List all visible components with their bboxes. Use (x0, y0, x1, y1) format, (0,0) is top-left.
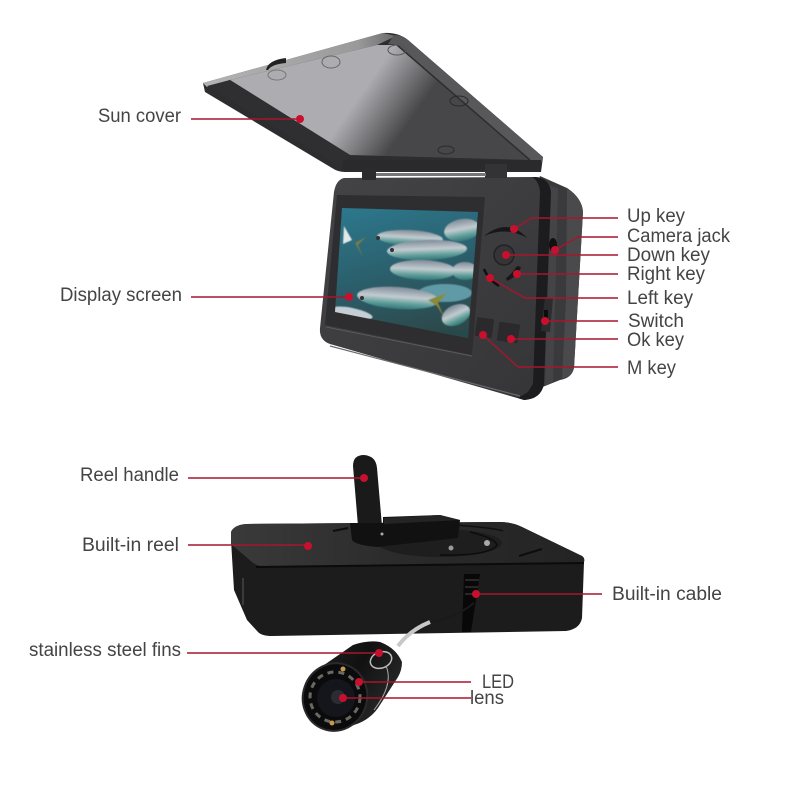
labels: M key (627, 358, 676, 379)
front housing (320, 177, 551, 400)
reel box (231, 522, 584, 636)
labels: Built-in cable (612, 584, 722, 605)
reel lid (231, 522, 584, 567)
labels: Ok key (627, 330, 684, 351)
labels: Up key (627, 206, 685, 227)
labels: Left key (627, 288, 693, 309)
labels: lens (470, 688, 504, 709)
labels: Down key (627, 245, 710, 266)
labels: Right key (627, 264, 705, 285)
labels: Camera jack (627, 226, 730, 247)
callout dots (296, 115, 559, 702)
labels: Display screen (60, 285, 182, 306)
labels: Reel handle (80, 465, 179, 486)
labels: Sun cover (98, 106, 182, 127)
labels: Built-in reel (82, 535, 179, 556)
camera probe (293, 641, 402, 740)
monitor: display unit (320, 176, 583, 400)
cable slot (462, 574, 480, 632)
callout lines (187, 119, 618, 698)
camera jack (549, 238, 557, 252)
labels: stainless steel fins (29, 640, 181, 661)
screen frame (325, 195, 485, 355)
control keys (484, 227, 527, 238)
sun cover (203, 33, 543, 180)
reel handle (350, 455, 460, 547)
camera cable (398, 603, 474, 646)
display screen image (335, 208, 478, 338)
labels: Switch (628, 311, 684, 332)
labels: LED (482, 672, 514, 693)
labels (29, 106, 730, 709)
back housing (500, 176, 583, 396)
side switch (541, 297, 553, 332)
